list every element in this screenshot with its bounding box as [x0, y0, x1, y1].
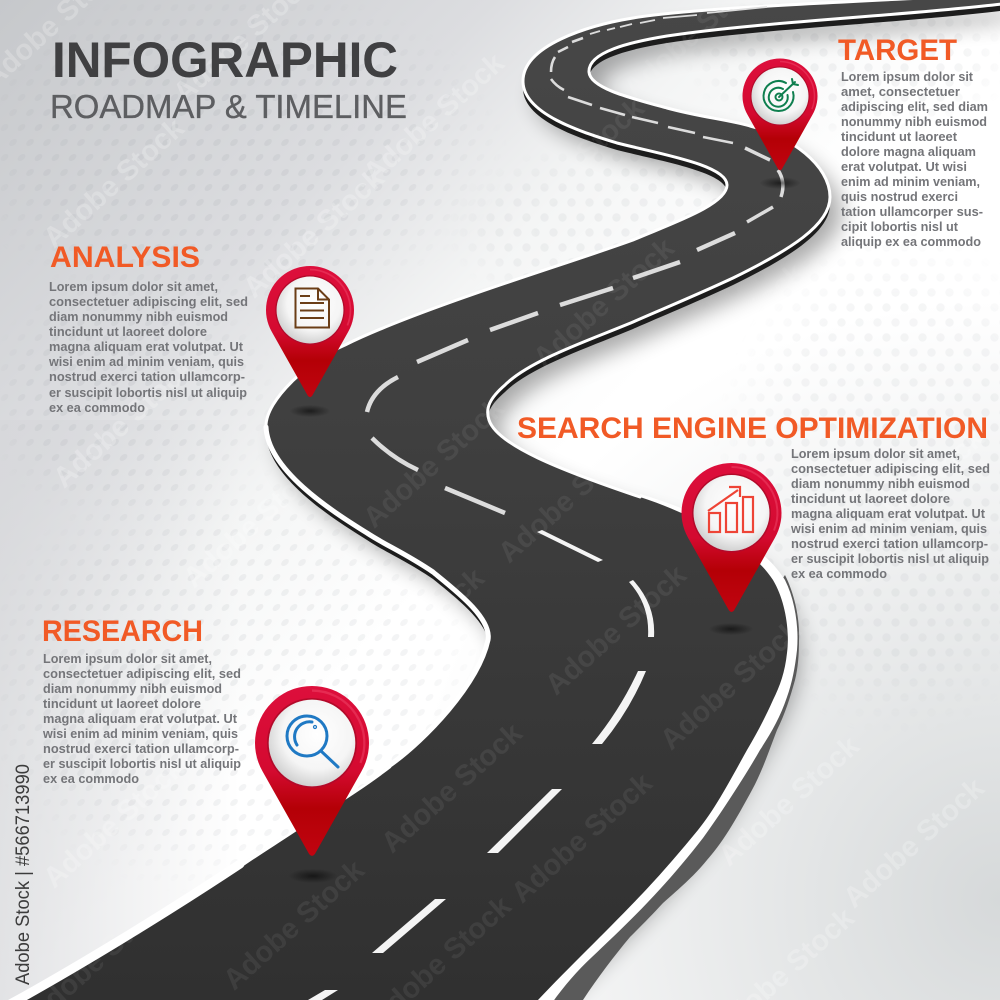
icon: magnifier [287, 716, 338, 767]
text block: search engine optimization: nostrud exerci tation ullamcorp- [791, 537, 988, 551]
text block: search engine optimization: magna aliquam erat volutpat. Ut [791, 507, 986, 521]
text block: search engine optimization: diam nonummy nibh euismod [791, 477, 970, 491]
road white edge wedge [500, 494, 798, 1000]
heading: analysis: ANALYSIS [50, 241, 200, 274]
heading: research: RESEARCH [42, 615, 203, 648]
text block: target [841, 70, 988, 249]
road watermark text: Adobe Stock [357, 392, 511, 535]
text block: research: er suscipit lobortis nisl ut aliquip [43, 757, 241, 771]
text block: research: consectetuer adipiscing elit, sed [43, 667, 241, 681]
road watermark text: Adobe Stock [657, 257, 811, 400]
text block: search engine optimization: ex ea commodo [791, 567, 887, 581]
text block: search engine optimization: tincidunt ut laoreet dolore [791, 492, 950, 506]
text block: target: tincidunt ut laoreet [841, 130, 958, 144]
text block: research: diam nonummy nibh euismod [43, 682, 222, 696]
text block: research: ex ea commodo [43, 772, 139, 786]
road watermark text: Adobe Stock [217, 854, 371, 997]
pin: analysis [266, 266, 354, 417]
background watermark text: Adobe Stock [37, 112, 191, 255]
title: INFOGRAPHIC [52, 32, 398, 88]
road watermark text: Adobe Stock [527, 232, 681, 375]
icon: bar chart [708, 487, 753, 532]
pin: search engine optimization [682, 463, 782, 635]
text block: analysis: tincidunt ut laoreet dolore [49, 325, 207, 339]
text block: target: enim ad minim veniam, [841, 175, 980, 189]
road watermark text: Adobe Stock [842, 242, 996, 385]
text block: target: adipiscing elit, sed diam [841, 100, 988, 114]
text block: target: cipit lobortis nisl ut [841, 220, 959, 234]
road watermark text: Adobe Stock [337, 562, 491, 705]
background watermark text: Adobe Stock [47, 352, 201, 495]
text block: target: quis nostrud exerci [841, 190, 958, 204]
text block: search engine optimization: wisi enim ad minim veniam, quis [790, 522, 987, 536]
pin: research [255, 686, 369, 883]
road watermark text: Adobe Stock [375, 717, 529, 860]
text block: analysis: consectetuer adipiscing elit, sed [49, 295, 248, 309]
road watermark text: Adobe Stock [539, 559, 693, 702]
text block: analysis: Lorem ipsum dolor sit amet, [49, 280, 218, 294]
background watermark text: Adobe Stock [37, 752, 191, 895]
text block: analysis: nostrud exerci tation ullamcorp- [49, 370, 245, 384]
stock id text: Adobe Stock | #566713990 [12, 764, 34, 985]
text block: analysis: diam nonummy nibh euismod [49, 310, 228, 324]
text block: research: Lorem ipsum dolor sit amet, [43, 652, 212, 666]
background watermark text: Adobe Stock [357, 47, 511, 190]
text block: search engine optimization [790, 447, 990, 581]
road watermark text: Adobe Stock [497, 92, 651, 235]
text block: analysis: magna aliquam erat volutpat. Ut [49, 340, 244, 354]
subtitle: ROADMAP & TIMELINE [50, 88, 407, 125]
text block: target: erat volutpat. Ut wisi [841, 160, 967, 174]
icon: document [296, 288, 329, 328]
heading: search engine optimization: SEARCH ENGINE OPTIMIZATION [517, 412, 988, 445]
lane markings far section [367, 7, 783, 513]
text block: target: Lorem ipsum dolor sit [841, 70, 974, 84]
text block: research: magna aliquam erat volutpat. Ut [43, 712, 238, 726]
text block: research: nostrud exerci tation ullamcorp- [43, 742, 239, 756]
heading: target: TARGET [838, 34, 957, 67]
text block: analysis: er suscipit lobortis nisl ut aliquip [49, 386, 247, 400]
text block: target: dolore magna aliquam [841, 145, 976, 159]
pin: target [742, 58, 818, 189]
icon: target [764, 79, 798, 111]
text block: research: wisi enim ad minim veniam, quis [42, 727, 238, 741]
background watermark text: Adobe Stock [837, 422, 991, 565]
text block: analysis: wisi enim ad minim veniam, quis [48, 355, 244, 369]
road watermark text: Adobe Stock [492, 427, 646, 570]
lane markings near section [308, 530, 654, 1000]
road watermark text: Adobe Stock [654, 614, 808, 757]
text block: search engine optimization: consectetuer adipiscing elit, sed [791, 462, 990, 476]
road watermark text: Adobe Stock [182, 752, 336, 895]
background watermark text: Adobe Stock [237, 162, 391, 305]
text block: analysis: ex ea commodo [49, 401, 145, 415]
text block: target: nonummy nibh euismod [841, 115, 987, 129]
background watermark text: Adobe Stock [177, 452, 331, 595]
text block: target: tation ullamcorper sus- [841, 205, 983, 219]
road watermark text: Adobe Stock [505, 767, 659, 910]
text block: search engine optimization: Lorem ipsum dolor sit amet, [791, 447, 960, 461]
text block: analysis [48, 280, 248, 415]
text block: research [42, 652, 241, 786]
text block: target: amet, consectetuer [841, 85, 960, 99]
background watermark text: Adobe Stock [712, 730, 866, 873]
road 3D edge [266, 1, 1000, 1000]
background watermark text: Adobe Stock [837, 772, 991, 915]
text block: target: aliquip ex ea commodo [841, 235, 981, 249]
text block: search engine optimization: er suscipit lobortis nisl ut aliquip [791, 552, 989, 566]
text block: research: tincidunt ut laoreet dolore [43, 697, 201, 711]
